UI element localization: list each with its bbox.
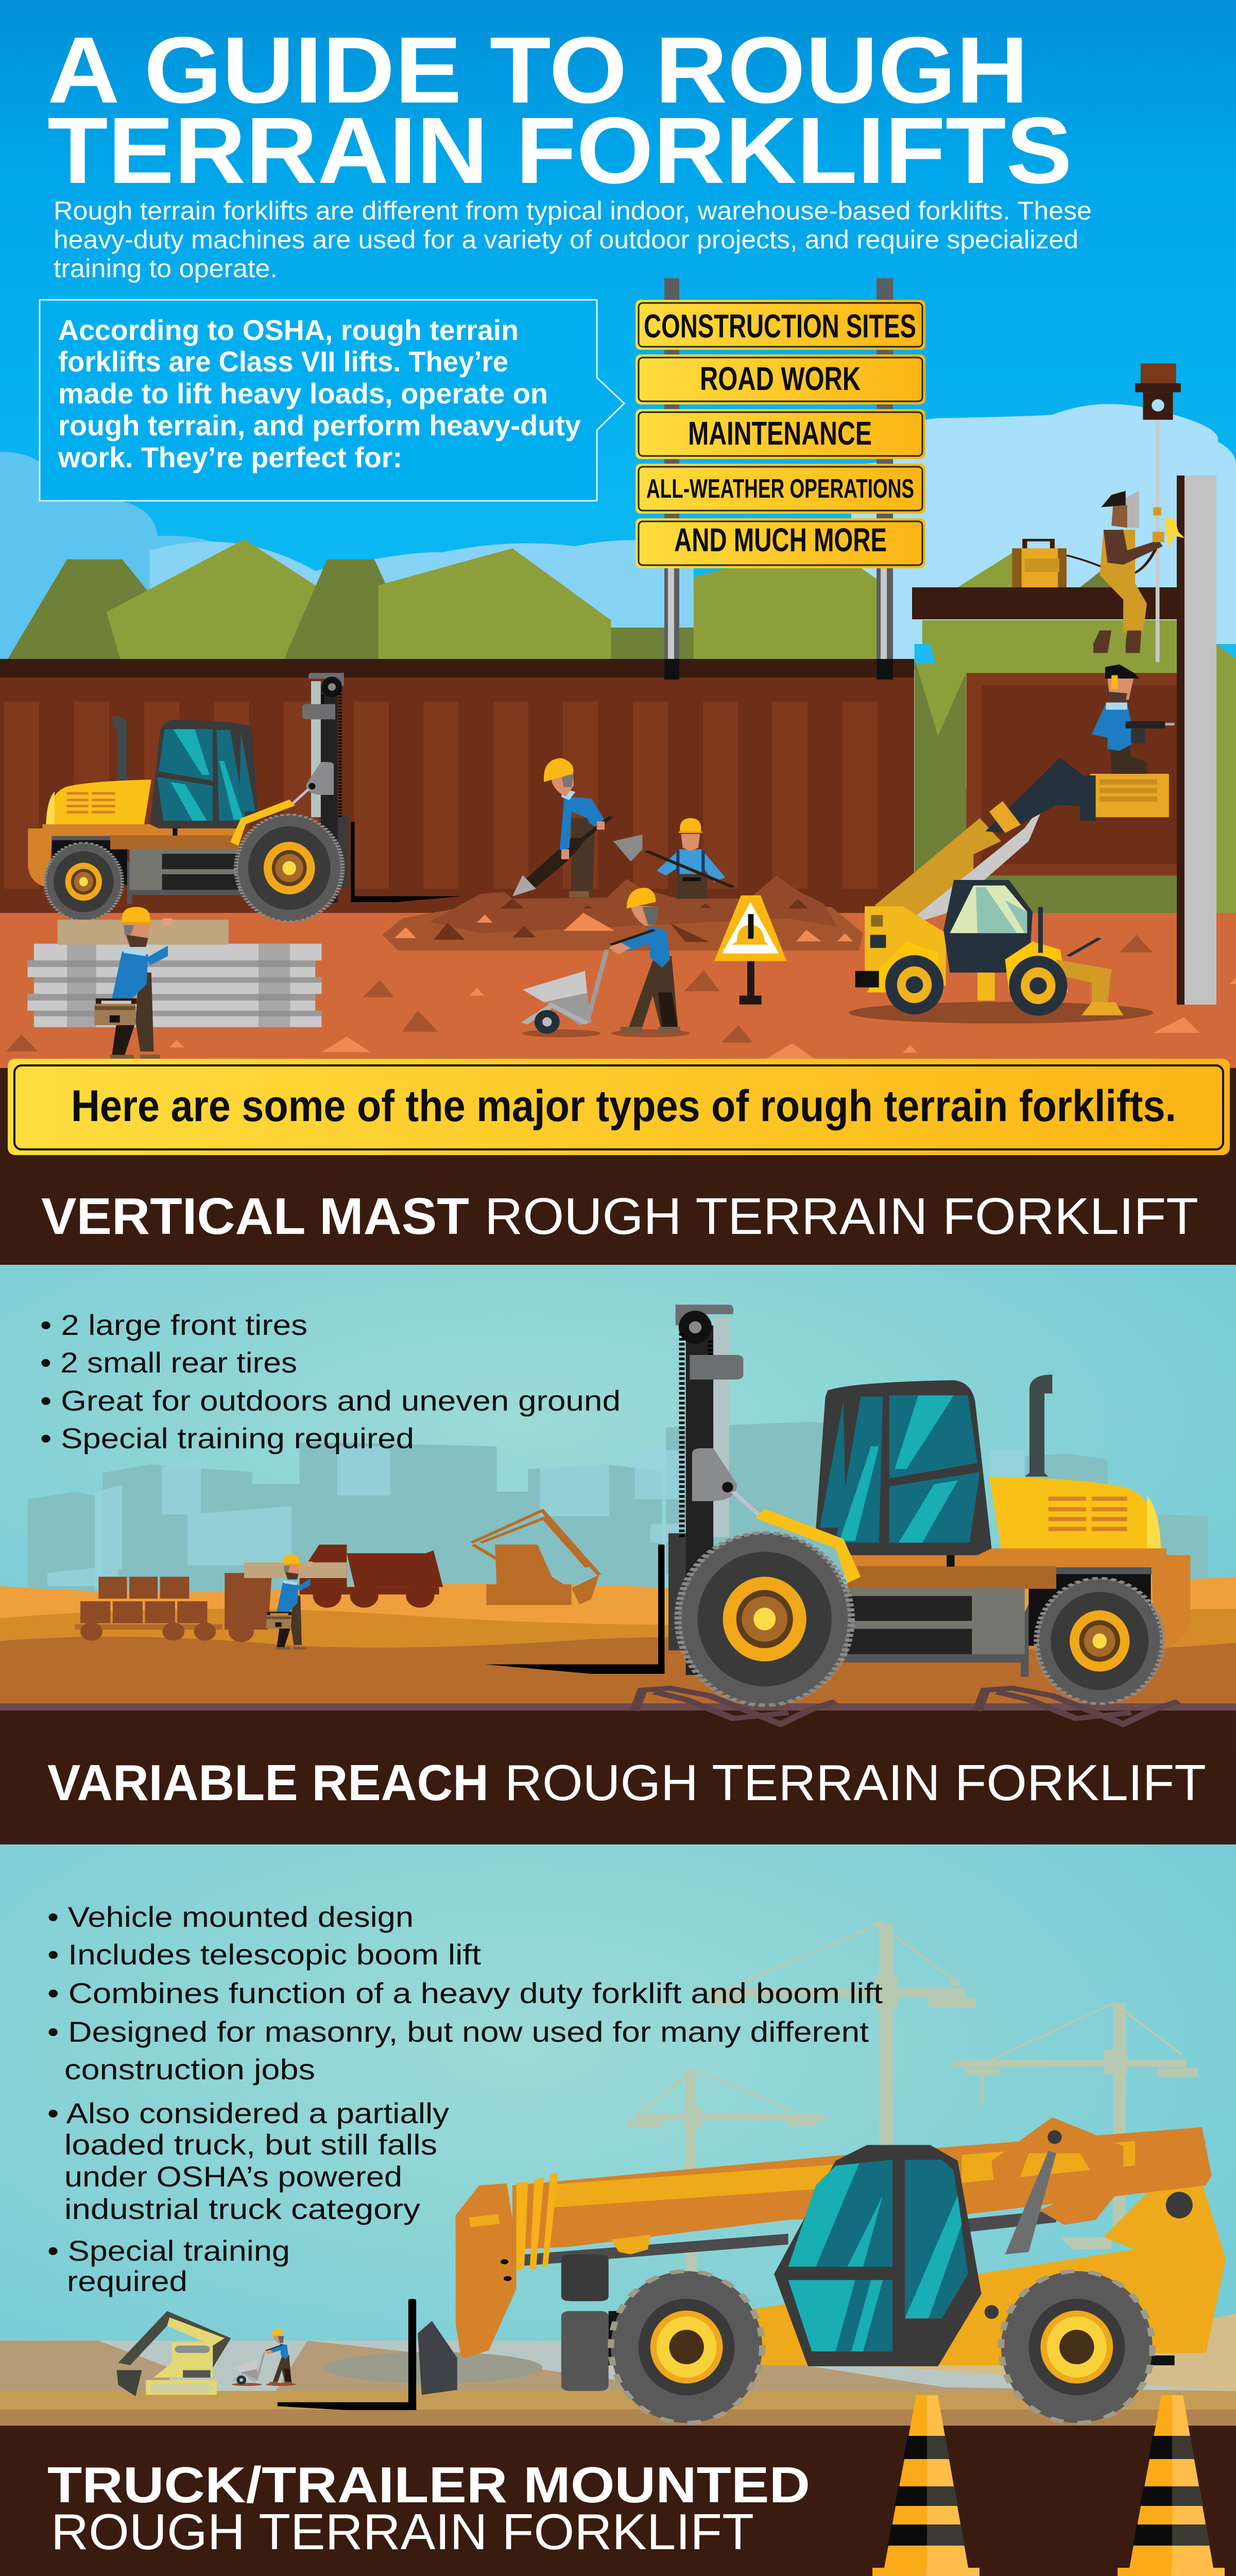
traffic cone left [872, 2395, 980, 2576]
clouds [0, 404, 1236, 665]
list: variable reach features: construction jobs [64, 2053, 315, 2086]
list: variable reach features: • Designed for masonry, but now used for many different [47, 2015, 869, 2048]
banner [8, 1059, 1230, 1155]
small worker with wheelbarrow [232, 2329, 296, 2386]
heading: variable reach: VARIABLE REACH [47, 1754, 489, 1811]
traffic cone right [1118, 2395, 1225, 2576]
list: vertical mast features: • 2 small rear tires [40, 1346, 297, 1379]
welder with crane hook [1012, 364, 1184, 662]
ground [0, 913, 1236, 1073]
section 3 ground [0, 2314, 1236, 2426]
heading: variable reach [47, 1754, 1206, 1811]
background truck, trailer and excavator [75, 1511, 599, 1642]
large vertical mast forklift [485, 1304, 1190, 1724]
sign: all-weather operations: ALL-WEATHER OPERATIONS [646, 474, 914, 504]
list: variable reach features: • Also considered a partially [47, 2097, 449, 2129]
steel column and platform [912, 476, 1216, 1005]
list: variable reach features: under OSHA’s powered [64, 2160, 402, 2193]
callout: OSHA class VII [40, 300, 624, 501]
callout: OSHA class VII: According to OSHA, rough terrain [58, 314, 519, 346]
brick wall [0, 659, 914, 917]
list: variable reach features: loaded truck, but still falls [64, 2128, 437, 2161]
telehandler with lift platform [849, 665, 1175, 1024]
band: section 4 header background [0, 2426, 1236, 2576]
list: vertical mast features: • Great for outdoors and uneven ground [40, 1384, 621, 1417]
list: variable reach features: industrial truck category [64, 2193, 420, 2225]
list: variable reach features: • Vehicle mounted design [47, 1901, 414, 1933]
intro paragraph: heavy-duty machines are used for a variety of outdoor projects, and require specialized [54, 225, 1078, 254]
list: vertical mast features [40, 1309, 621, 1454]
dirt pile with digging workers [382, 758, 863, 951]
intro paragraph: training to operate. [54, 254, 278, 283]
list: variable reach features: • Combines function of a heavy duty forklift and boom lift [47, 1977, 883, 2009]
intro paragraph: Rough terrain forklifts are different from typical indoor, warehouse-based forklifts. These [54, 196, 1092, 225]
concrete slabs stack [28, 944, 321, 1027]
callout: OSHA class VII: made to lift heavy loads, operate on [58, 377, 548, 410]
callout: OSHA class VII: forklifts are Class VII lifts. They’re [58, 345, 508, 378]
ground rocks [6, 935, 1236, 1059]
list: vertical mast features: • 2 large front tires [40, 1309, 307, 1341]
variable reach telehandler [278, 2117, 1226, 2423]
heading: truck/trailer mounted: TRUCK/TRAILER MOUNTED [47, 2456, 810, 2513]
worker carrying plank and toolbox [58, 907, 229, 1059]
sign: and much more: AND MUCH MORE [674, 521, 887, 558]
heading: variable reach: ROUGH TERRAIN FORKLIFT [505, 1754, 1206, 1811]
section 2 ground layers [0, 1577, 1236, 1752]
list: variable reach features: • Includes telescopic boom lift [47, 1938, 481, 1971]
sign: maintenance: MAINTENANCE [688, 415, 872, 452]
heading: vertical mast: VERTICAL MAST [41, 1188, 469, 1245]
title [47, 17, 1072, 203]
right background: hills and back wall [914, 644, 1236, 913]
warning sign [714, 895, 787, 1005]
sky background [0, 0, 1236, 670]
small worker with plank [244, 1554, 347, 1650]
list: variable reach features: • Special training [47, 2234, 290, 2267]
list: variable reach features [47, 1901, 883, 2297]
list: vertical mast features: • Special training required [40, 1422, 414, 1454]
callout: OSHA class VII: work. They’re perfect for: [58, 441, 402, 473]
worker pushing wheelbarrow [522, 888, 690, 1037]
sign: and much more [636, 518, 925, 568]
small excavator [117, 2311, 231, 2396]
panel: variable reach background [0, 1844, 1236, 2427]
title: TERRAIN FORKLIFTS [47, 97, 1072, 203]
tower cranes [627, 1921, 1198, 2341]
sign: construction sites [636, 300, 925, 350]
dark band behind banner [0, 1068, 1236, 1265]
sign: road work [636, 354, 925, 404]
intro paragraph [54, 196, 1092, 283]
mountains [4, 539, 1182, 665]
band: section 3 header background [0, 1752, 1236, 1844]
sign: construction sites: CONSTRUCTION SITES [644, 308, 916, 345]
panel: vertical mast background [0, 1265, 1236, 1710]
signpost poles [664, 278, 893, 675]
heading: truck/trailer mounted: ROUGH TERRAIN FORKLIFT [51, 2503, 754, 2560]
heading: vertical mast: ROUGH TERRAIN FORKLIFT [485, 1188, 1198, 1245]
list: variable reach features: required [67, 2265, 187, 2297]
sign: road work: ROAD WORK [700, 360, 861, 397]
title: A GUIDE TO ROUGH [47, 17, 1028, 123]
callout: OSHA class VII: rough terrain, and perform heavy-duty [58, 409, 581, 442]
column foreground [1177, 618, 1216, 1005]
sign: all-weather operations [636, 464, 925, 514]
vertical mast forklift [28, 673, 461, 922]
heading: vertical mast [41, 1188, 1198, 1245]
sign: maintenance [636, 409, 925, 459]
city silhouette [28, 1422, 1208, 1594]
heading: truck/trailer mounted [47, 2456, 810, 2560]
